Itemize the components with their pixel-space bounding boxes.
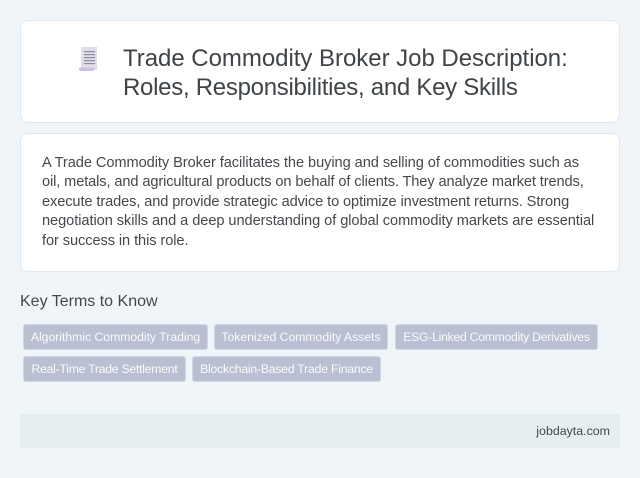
- tag list: [23, 324, 598, 382]
- title: [123, 45, 568, 101]
- tag: [23, 356, 186, 382]
- panel: description: [20, 133, 620, 272]
- heading: key terms: Key Terms to Know: [20, 293, 158, 310]
- title: Trade Commodity Broker Job Description:: [123, 45, 568, 72]
- panel: header: [20, 20, 620, 123]
- tag: Tokenized Commodity Assets: [221, 330, 381, 344]
- text block: description: for success in this role.: [42, 233, 188, 249]
- text block: description: negotiation skills and a deep understanding of global commodity markets are essential: [42, 213, 594, 229]
- text block: description: [42, 155, 594, 249]
- tag: Real-Time Trade Settlement: [32, 362, 177, 376]
- text block: description: A Trade Commodity Broker facilitates the buying and selling of commodities such as: [42, 155, 579, 171]
- tag: [23, 324, 208, 350]
- tag: [395, 324, 598, 350]
- tag: Blockchain-Based Trade Finance: [200, 362, 373, 376]
- footer bar: [20, 414, 620, 448]
- footer text: jobdayta.com: [536, 424, 610, 438]
- tag: Algorithmic Commodity Trading: [31, 330, 200, 344]
- tag: [192, 356, 381, 382]
- text block: description: execute trades, and provide strategic advice to optimize investment returns. Strong: [42, 194, 569, 210]
- tag: [214, 324, 388, 350]
- text block: description: oil, metals, and agricultural products on behalf of clients. They analyze market trends,: [42, 174, 584, 190]
- icon: document scroll: [79, 47, 97, 71]
- title: Roles, Responsibilities, and Key Skills: [123, 74, 518, 101]
- tag: ESG-Linked Commodity Derivatives: [403, 330, 590, 344]
